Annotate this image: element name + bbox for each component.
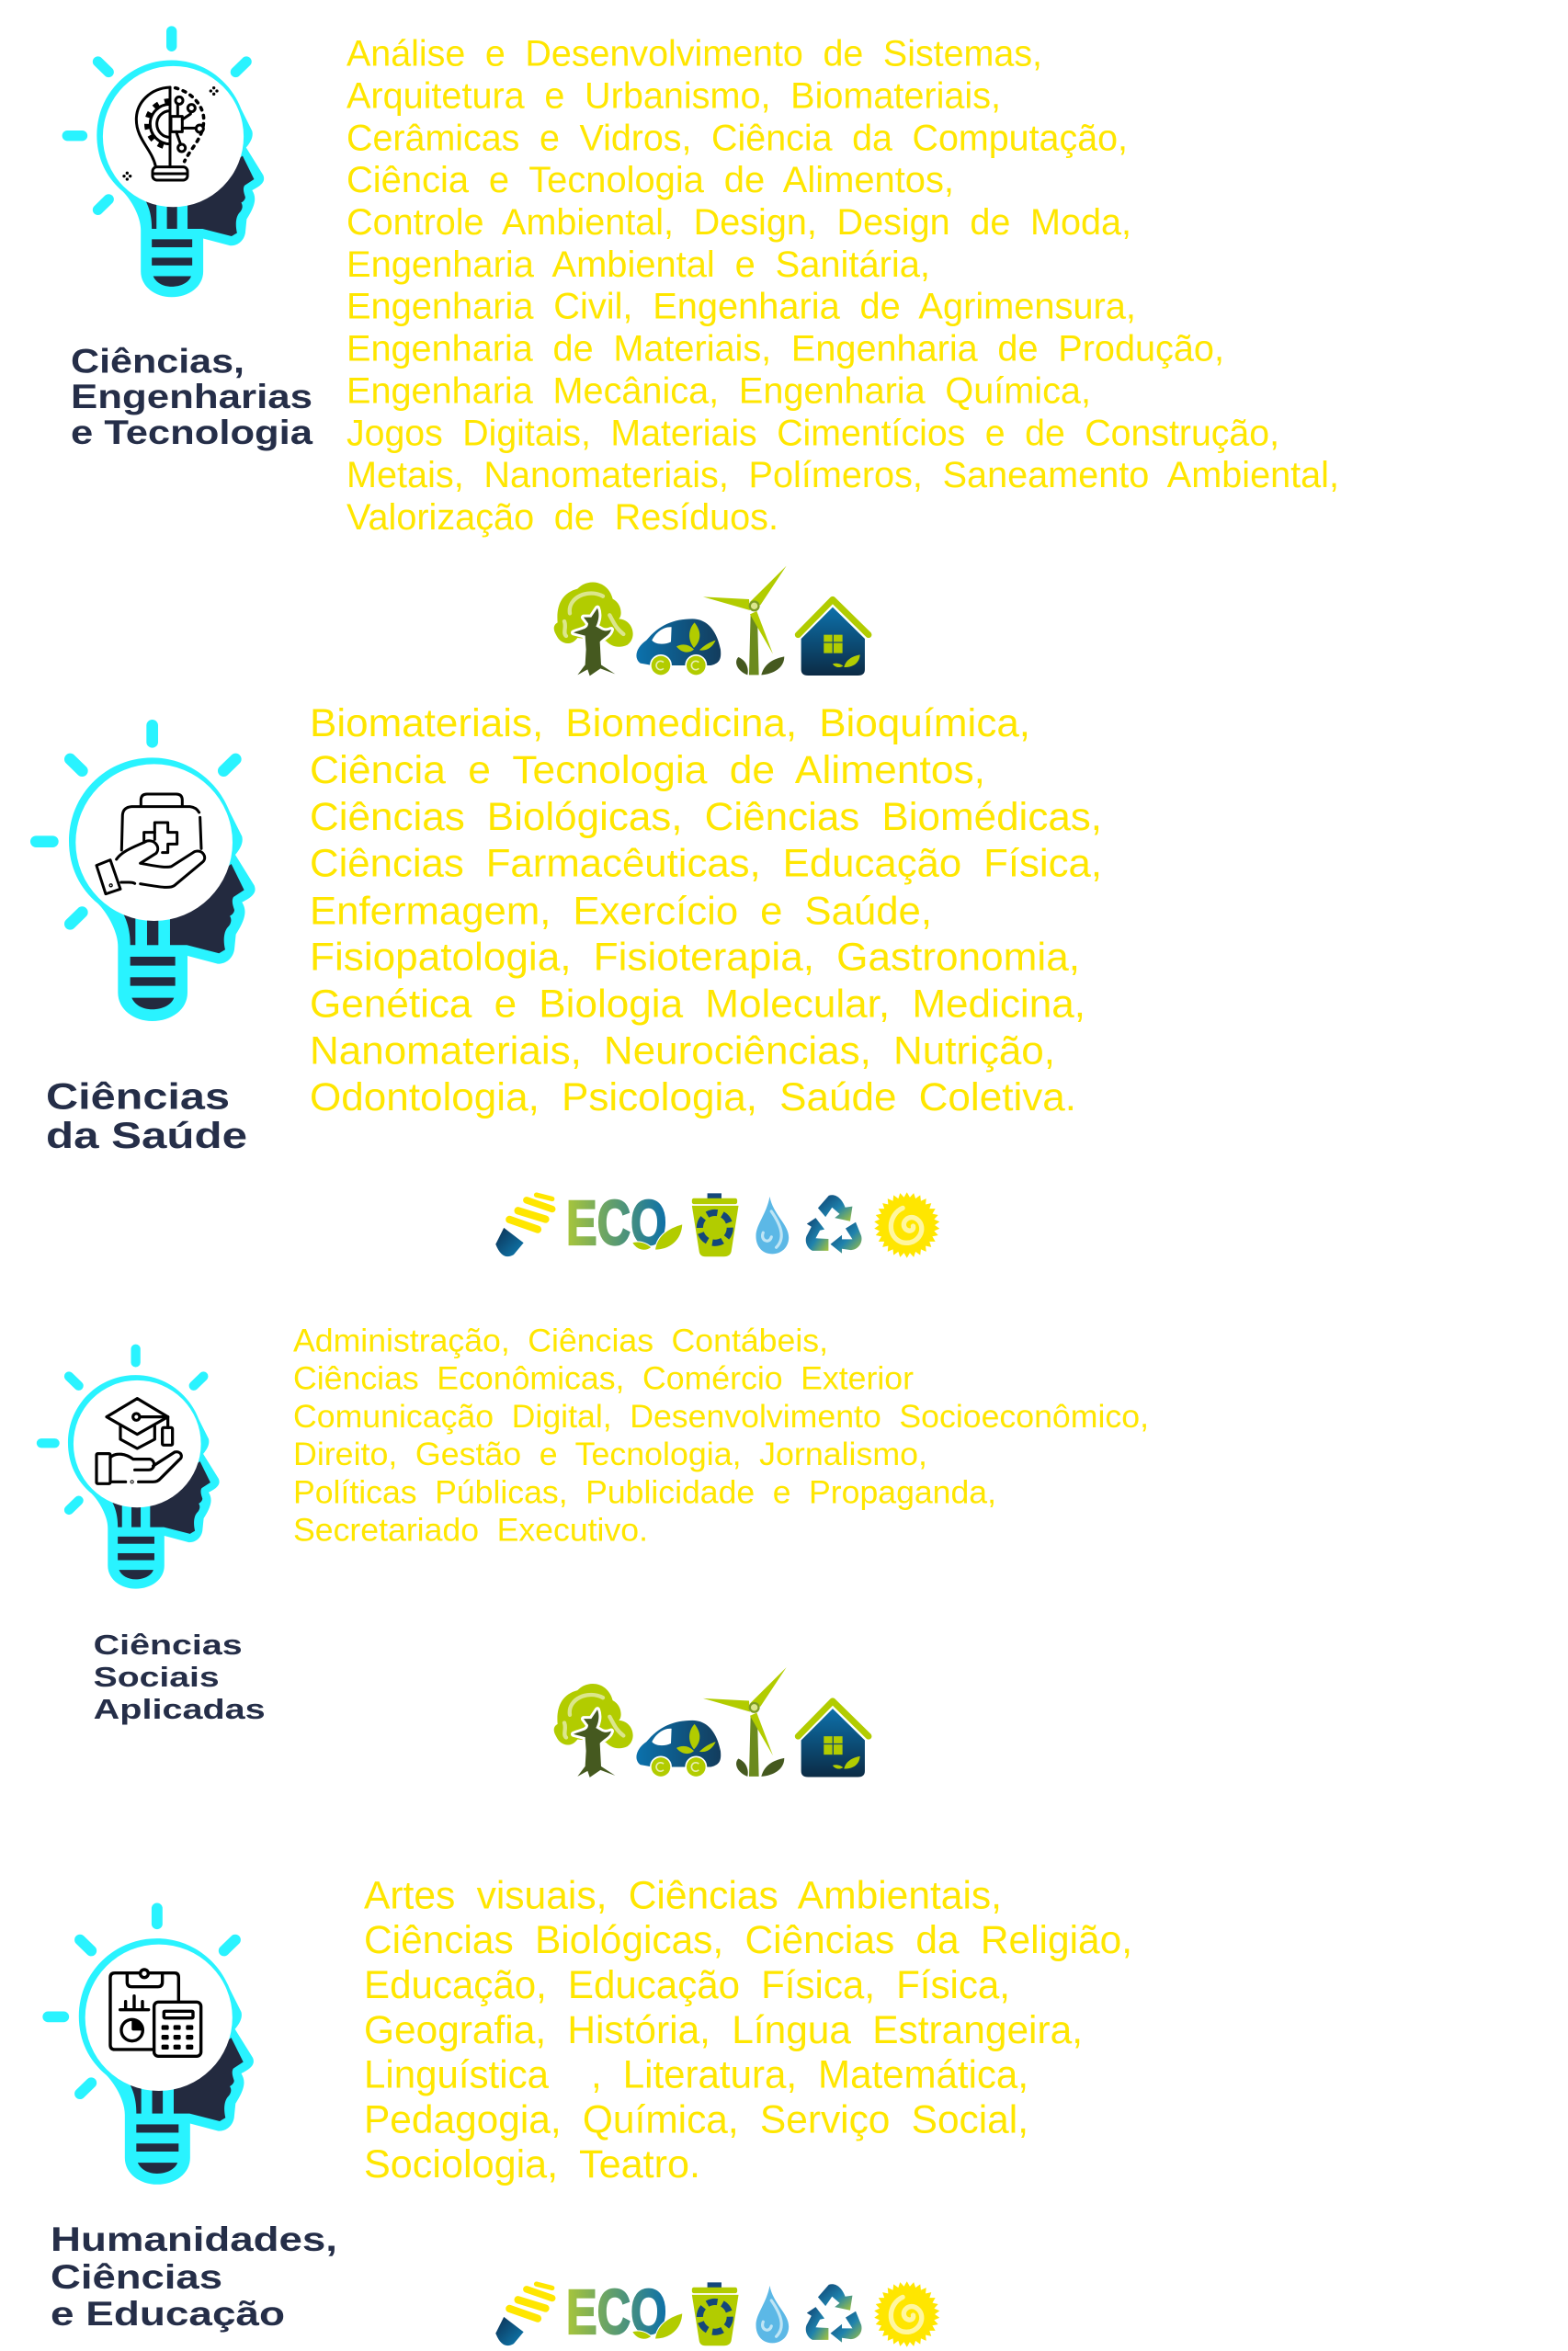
text block: cursos de ciências, engenharias e tecnologia: Engenharia Ambiental e Sanitária, xyxy=(347,244,930,285)
text block: cursos de ciências da saúde: Odontologia, Psicologia, Saúde Coletiva. xyxy=(310,1075,1076,1119)
heading: Ciências Sociais Aplicadas: Sociais xyxy=(94,1661,220,1693)
text block: cursos de ciências, engenharias e tecnologia: Engenharia de Materiais, Engenharia de Produção, xyxy=(347,329,1224,369)
text block: cursos de ciências sociais aplicadas: Comunicação Digital, Desenvolvimento Socioeconômico, xyxy=(293,1399,1149,1435)
heading: Ciências, Engenharias e Tecnologia: Ciências, xyxy=(71,343,244,380)
heading: Ciências da Saúde: Ciências xyxy=(46,1077,230,1118)
text block: cursos de ciências da saúde: Ciências Biológicas, Ciências Biomédicas, xyxy=(310,795,1102,839)
text block: cursos de ciências da saúde: Ciência e Tecnologia de Alimentos, xyxy=(310,748,985,792)
text block: cursos de ciências sociais aplicadas xyxy=(293,1323,1149,1548)
heading: Humanidades, Ciências e Educação: Humanidades, xyxy=(51,2220,337,2258)
text block: cursos de ciências, engenharias e tecnologia: Jogos Digitais, Materiais Cimentícios e de Construção, xyxy=(347,413,1279,453)
text block: cursos de humanidades, ciências e educação: Educação, Educação Física, Física, xyxy=(364,1963,1010,2007)
panel: Ciências, Engenharias e Tecnologia xyxy=(67,31,1339,676)
heading: Ciências, Engenharias e Tecnologia xyxy=(71,343,312,451)
icons: tree, car, wind turbine, house xyxy=(554,1667,869,1777)
icon: lightbulb head with technology xyxy=(67,31,264,297)
text block: cursos de ciências sociais aplicadas: Administração, Ciências Contábeis, xyxy=(293,1323,828,1358)
text block: cursos de ciências, engenharias e tecnologia: Engenharia Civil, Engenharia de Agrimensura, xyxy=(347,287,1136,327)
text block: cursos de humanidades, ciências e educação xyxy=(364,1873,1132,2186)
text block: cursos de humanidades, ciências e educação: Artes visuais, Ciências Ambientais, xyxy=(364,1873,1002,1917)
text block: cursos de humanidades, ciências e educação: Sociologia, Teatro. xyxy=(364,2142,700,2186)
icon: lightbulb head with clipboard and calculator xyxy=(48,1908,254,2185)
text block: cursos de ciências da saúde: Fisiopatologia, Fisioterapia, Gastronomia, xyxy=(310,936,1080,980)
text block: cursos de ciências da saúde: Ciências Farmacêuticas, Educação Física, xyxy=(310,842,1102,886)
text block: cursos de ciências da saúde: Enfermagem, Exercício e Saúde, xyxy=(310,890,932,934)
heading: Ciências Sociais Aplicadas: Aplicadas xyxy=(94,1693,266,1725)
panel: Humanidades, Ciências e Educação xyxy=(48,1873,1132,2351)
heading: Humanidades, Ciências e Educação xyxy=(51,2220,337,2333)
text block: cursos de humanidades, ciências e educação: Ciências Biológicas, Ciências da Religião, xyxy=(364,1918,1132,1962)
text block: cursos de ciências, engenharias e tecnologia: Ciência e Tecnologia de Alimentos, xyxy=(347,160,954,200)
heading: Ciências, Engenharias e Tecnologia: Engenharias xyxy=(71,378,312,415)
text block: cursos de ciências, engenharias e tecnologia xyxy=(347,34,1339,538)
icon: lightbulb head with health kit xyxy=(36,725,256,1021)
text block: cursos de ciências sociais aplicadas: Direito, Gestão e Tecnologia, Jornalismo, xyxy=(293,1437,927,1472)
icons: tree, car, wind turbine, house xyxy=(554,566,869,676)
panel: Ciências Sociais Aplicadas xyxy=(41,1323,1149,1777)
text block: cursos de ciências sociais aplicadas: Políticas Públicas, Publicidade e Propaganda, xyxy=(293,1474,996,1510)
text block: cursos de ciências, engenharias e tecnologia: Engenharia Mecânica, Engenharia Química, xyxy=(347,370,1091,411)
icon: lightbulb head with graduation cap xyxy=(41,1349,220,1589)
text block: cursos de ciências, engenharias e tecnologia: Cerâmicas e Vidros, Ciência da Computação, xyxy=(347,118,1128,158)
text block: cursos de ciências da saúde: Genética e Biologia Molecular, Medicina, xyxy=(310,982,1085,1026)
heading: Humanidades, Ciências e Educação: Ciências xyxy=(51,2258,222,2296)
heading: Humanidades, Ciências e Educação: e Educação xyxy=(51,2295,285,2333)
text block: cursos de ciências sociais aplicadas: Secretariado Executivo. xyxy=(293,1513,648,1548)
text block: cursos de ciências, engenharias e tecnologia: Análise e Desenvolvimento de Sistemas, xyxy=(347,34,1042,74)
icons: lamp, eco, bin, drop, recycle, sun xyxy=(495,2271,950,2351)
text block: cursos de ciências, engenharias e tecnologia: Valorização de Resíduos. xyxy=(347,497,778,538)
text block: cursos de humanidades, ciências e educação: Linguística , Literatura, Matemática, xyxy=(364,2053,1028,2097)
heading: Ciências da Saúde: da Saúde xyxy=(46,1116,247,1156)
text block: cursos de ciências da saúde: Biomateriais, Biomedicina, Bioquímica, xyxy=(310,701,1030,745)
text block: cursos de ciências, engenharias e tecnologia: Metais, Nanomateriais, Polímeros, Saneamento Ambiental, xyxy=(347,455,1339,495)
text block: cursos de ciências, engenharias e tecnologia: Controle Ambiental, Design, Design de Moda, xyxy=(347,202,1131,243)
text block: cursos de humanidades, ciências e educação: Pedagogia, Química, Serviço Social, xyxy=(364,2097,1028,2141)
text block: cursos de ciências sociais aplicadas: Ciências Econômicas, Comércio Exterior xyxy=(293,1361,914,1397)
text block: cursos de humanidades, ciências e educação: Geografia, História, Língua Estrangeira, xyxy=(364,2008,1083,2052)
heading: Ciências da Saúde xyxy=(46,1077,247,1156)
heading: Ciências Sociais Aplicadas: Ciências xyxy=(94,1629,243,1661)
text block: cursos de ciências, engenharias e tecnologia: Arquitetura e Urbanismo, Biomateriais, xyxy=(347,75,1001,116)
heading: Ciências Sociais Aplicadas xyxy=(94,1629,266,1725)
text block: cursos de ciências da saúde: Nanomateriais, Neurociências, Nutrição, xyxy=(310,1028,1055,1073)
icons: lamp, eco, bin, drop, recycle, sun xyxy=(495,1182,950,1262)
panel: Ciências da Saúde xyxy=(36,701,1102,1262)
text block: cursos de ciências da saúde xyxy=(310,701,1102,1119)
heading: Ciências, Engenharias e Tecnologia: e Tecnologia xyxy=(71,414,312,451)
